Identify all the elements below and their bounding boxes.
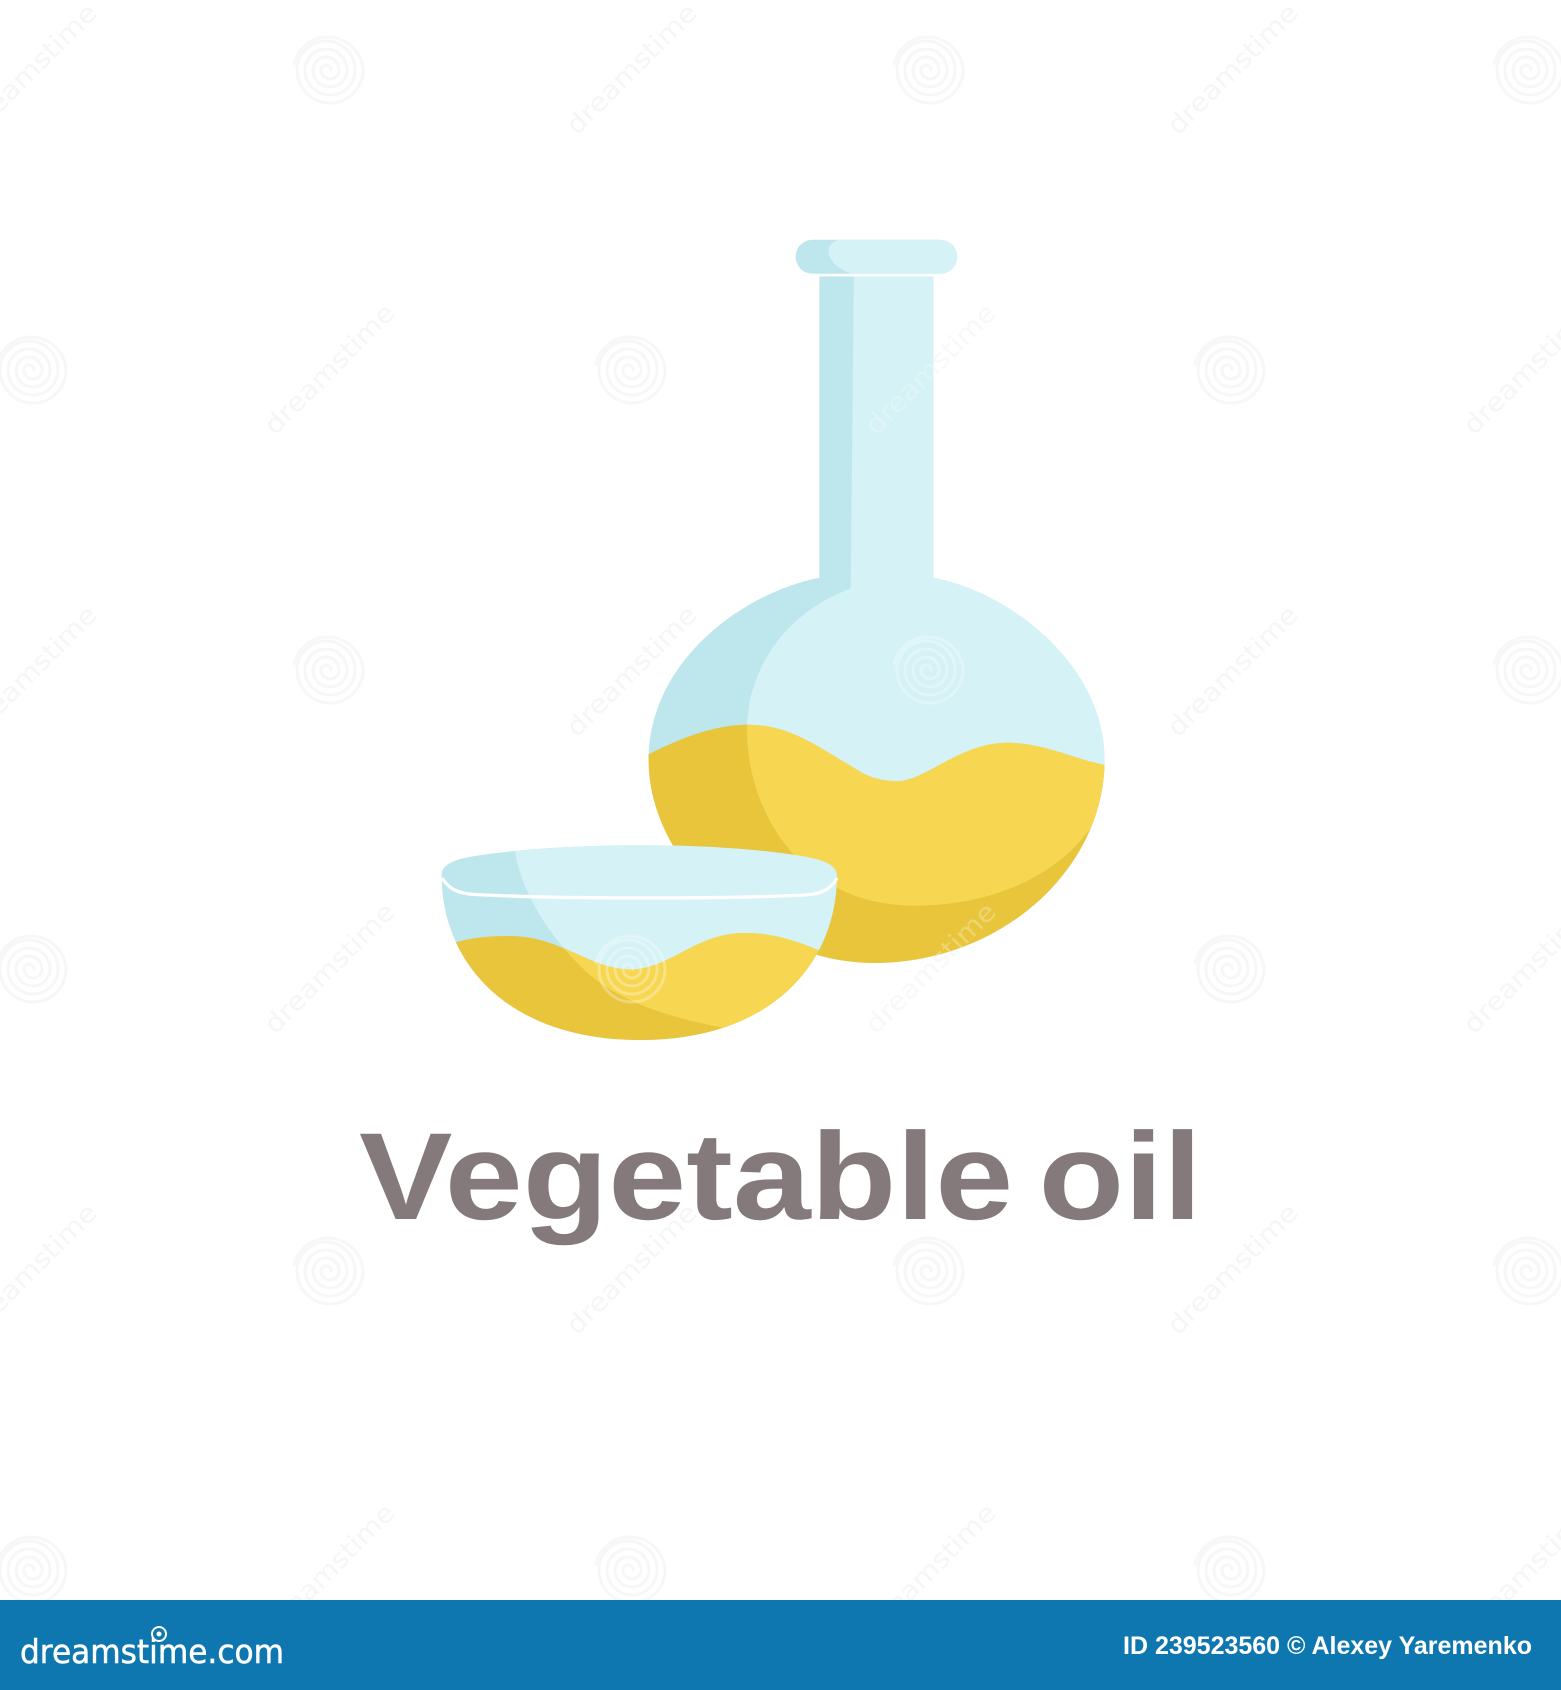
watermark pattern: dreamstime [1162,1198,1305,1341]
bowl glass and oil [442,845,837,1040]
icon: glass flask with oil [640,239,1115,1000]
footer logo: dreamstime.com [20,1632,284,1671]
watermark pattern: dreamstime [259,298,402,441]
watermark pattern: dreamstime [860,897,1003,1040]
watermark over artwork: dreamstime [860,897,1003,1040]
watermark pattern: dreamstime [860,298,1003,441]
icon: glass bowl with oil [442,845,838,1040]
footer band [0,1600,1561,1690]
title: Vegetable oil [359,1108,1202,1246]
watermark pattern: dreamstime [1162,0,1305,141]
watermark over artwork [596,298,1003,1040]
watermark over artwork: dreamstime [860,298,1003,441]
watermark pattern: dreamstime [1162,600,1305,743]
watermark pattern: dreamstime [259,1498,402,1641]
watermark pattern: dreamstime [561,1198,704,1341]
flask body and neck [640,270,1115,1000]
watermark pattern: dreamstime [860,1498,1003,1641]
footer credit: ID 239523560 © Alexey Yaremenko [1123,1632,1532,1660]
bowl rim highlight [442,878,837,898]
flask lip [795,239,960,274]
watermark pattern: dreamstime [561,600,704,743]
watermark pattern: dreamstime [259,897,402,1040]
watermark pattern: dreamstime [561,0,704,141]
